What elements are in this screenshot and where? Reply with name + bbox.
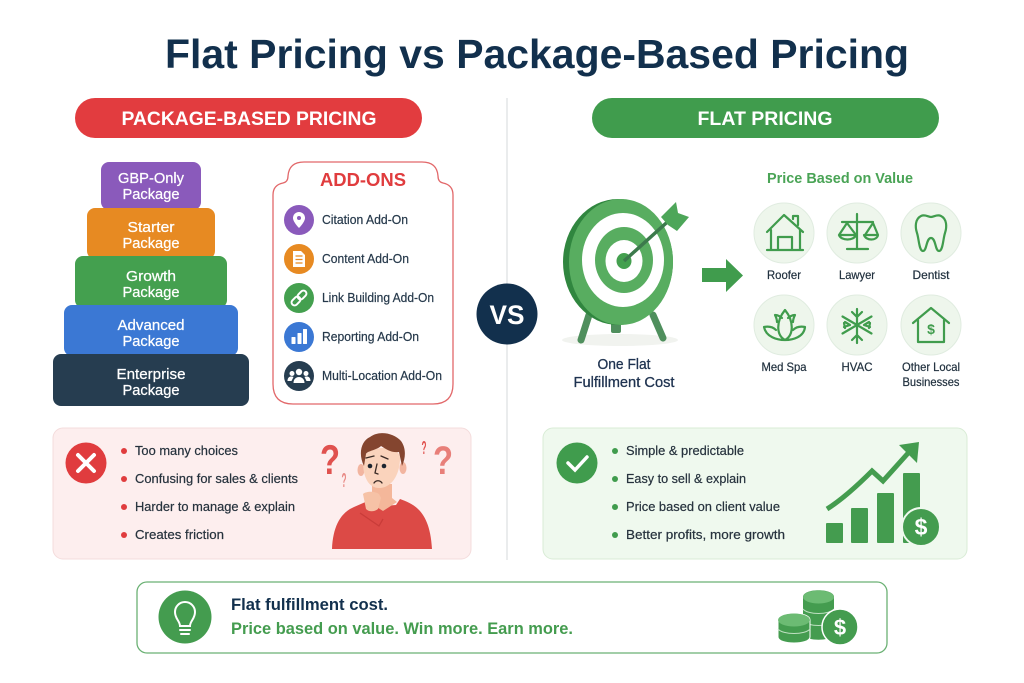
package pyramid: Package xyxy=(122,285,180,301)
heading: package-based pricing xyxy=(75,98,422,138)
package pyramid: GBP-Only xyxy=(118,171,185,187)
panel: package drawbacks xyxy=(53,428,471,559)
industry labels xyxy=(762,268,960,389)
industry labels: Businesses xyxy=(902,375,960,389)
icon: confused person: ? xyxy=(433,439,453,483)
package pyramid: Package xyxy=(122,334,180,350)
heading: package-based pricing: PACKAGE-BASED PRICING xyxy=(122,109,376,130)
icon: confused person: ? xyxy=(342,470,346,492)
heading: price based on value: Price Based on Value xyxy=(767,171,913,187)
panel: add-ons: ADD-ONS xyxy=(320,170,406,190)
industry labels: HVAC xyxy=(842,360,873,374)
industry labels: Lawyer xyxy=(839,268,875,282)
package pyramid: Package xyxy=(122,383,180,399)
package pyramid: Package xyxy=(122,236,180,252)
label: one flat fulfillment cost: Fulfillment Cost xyxy=(574,375,674,391)
panel: package drawbacks: Harder to manage & explain xyxy=(135,499,295,514)
icon: confused person: ? xyxy=(320,436,340,483)
icon: coins: $ xyxy=(834,615,846,640)
industry labels: Med Spa xyxy=(762,360,807,374)
panel: add-ons: Citation Add-On xyxy=(322,213,408,227)
vs badge: VS xyxy=(490,300,524,330)
industry labels: Other Local xyxy=(902,360,960,374)
icon: confused person: ? xyxy=(422,438,426,458)
package pyramid: Starter xyxy=(128,220,175,236)
icon: confused person xyxy=(320,433,453,549)
panel: add-ons: Reporting Add-On xyxy=(322,330,419,344)
panel: add-ons: Link Building Add-On xyxy=(322,291,434,305)
package pyramid: Enterprise xyxy=(116,367,186,383)
icon: target with arrow xyxy=(562,199,689,346)
package pyramid: Package xyxy=(122,187,180,203)
panel: flat pricing benefits: Simple & predictable xyxy=(626,443,744,458)
arrow xyxy=(702,259,743,292)
vs badge xyxy=(476,284,538,344)
heading: flat pricing xyxy=(592,98,939,138)
panel: add-ons: Multi-Location Add-On xyxy=(322,369,442,383)
panel: bottom takeaway: Flat fulfillment cost. xyxy=(231,596,388,614)
icon: growth chart xyxy=(826,442,940,546)
panel: add-ons xyxy=(273,162,453,404)
package pyramid: Growth xyxy=(126,269,176,285)
package pyramid xyxy=(53,162,249,406)
label: one flat fulfillment cost: One Flat xyxy=(598,357,650,373)
panel: flat pricing benefits xyxy=(543,428,967,559)
package pyramid: Advanced xyxy=(118,318,184,334)
icon: coins xyxy=(778,590,858,645)
panel: flat pricing benefits: Price based on client value xyxy=(626,499,780,514)
industry labels: Dentist xyxy=(912,268,950,282)
panel: bottom takeaway: Price based on value. Win more. Earn more. xyxy=(231,620,573,638)
industry icons: $ xyxy=(927,321,935,337)
industry icons xyxy=(754,203,961,355)
panel: package drawbacks: Creates friction xyxy=(135,527,224,542)
panel: flat pricing benefits: Easy to sell & explain xyxy=(626,471,746,486)
icon: growth chart: $ xyxy=(915,514,928,540)
panel: add-ons: Content Add-On xyxy=(322,252,409,266)
panel: flat pricing benefits: Better profits, more growth xyxy=(626,527,785,542)
panel: package drawbacks: Confusing for sales & clients xyxy=(135,471,298,486)
heading: flat pricing: FLAT PRICING xyxy=(698,109,832,130)
label: one flat fulfillment cost xyxy=(574,357,674,391)
panel: bottom takeaway xyxy=(137,582,887,653)
industry labels: Roofer xyxy=(767,268,801,282)
title: Flat Pricing vs Package-Based Pricing xyxy=(165,31,909,77)
panel: package drawbacks: Too many choices xyxy=(135,443,238,458)
